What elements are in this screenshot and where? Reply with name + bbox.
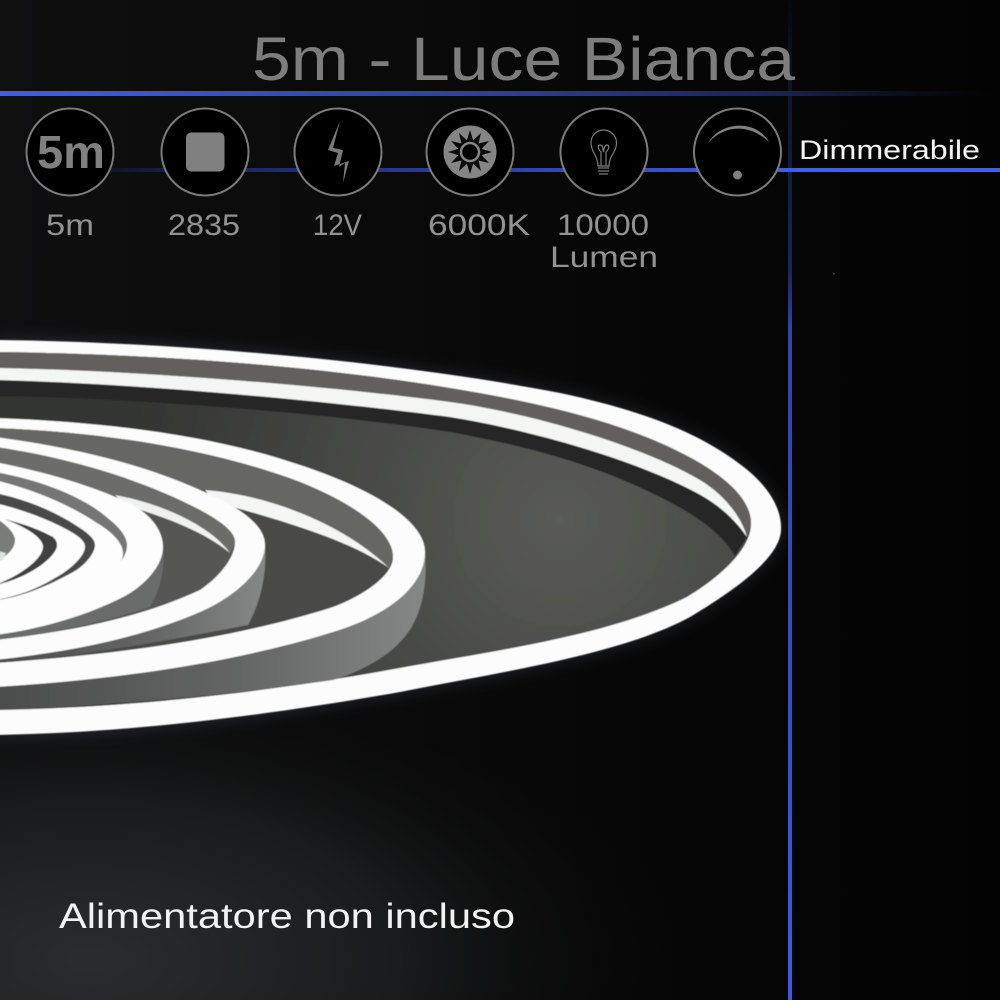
label: 12V: 12V — [313, 209, 362, 242]
red speck — [833, 273, 834, 274]
icon: lightning bolt — [294, 108, 382, 196]
ring D — [0, 516, 43, 585]
icon: square chip — [162, 108, 248, 196]
spec: LED chip 2835 — [162, 108, 248, 242]
strip glow — [0, 340, 781, 735]
blue icon line — [0, 168, 1000, 172]
spec: dimmable — [694, 108, 980, 196]
ring 2 — [0, 418, 425, 687]
ring 3 — [0, 437, 265, 660]
label: 6000K: 6000K — [428, 209, 530, 242]
spec: voltage 12V — [294, 108, 382, 242]
label: 10000 Lumen — [550, 209, 658, 274]
label: Dimmerabile: Dimmerabile — [799, 135, 980, 165]
ring B — [0, 480, 123, 617]
ring A — [0, 462, 163, 635]
title: 5m - Luce Bianca — [252, 25, 795, 93]
spec: colour temperature 6000K — [426, 108, 530, 242]
outer ring — [0, 340, 781, 735]
icon: dimmer dial — [694, 108, 781, 196]
ring A wall — [0, 547, 163, 640]
spec: luminous flux 10000 Lumen — [550, 108, 658, 274]
blue vertical line — [788, 0, 792, 1000]
label: 5m: 5m — [46, 209, 94, 242]
ring C — [0, 503, 85, 600]
ring 2 wall — [0, 552, 426, 710]
icon: light bulb — [560, 108, 648, 196]
label: 10000 Lumen: Lumen — [550, 241, 658, 274]
label: 2835: 2835 — [168, 209, 240, 242]
icon: 5m badge: 5m — [37, 126, 105, 178]
note: power supply not included: Alimentatore non incluso — [59, 897, 515, 936]
photo: glowing LED neon strip coil — [0, 340, 781, 735]
blue top line — [0, 91, 1000, 96]
coil shapes — [0, 340, 781, 735]
label: 10000 Lumen: 10000 — [557, 209, 649, 242]
spec: length 5m — [26, 108, 114, 242]
icon: sun — [426, 108, 514, 196]
ring 3 wall — [0, 545, 265, 663]
